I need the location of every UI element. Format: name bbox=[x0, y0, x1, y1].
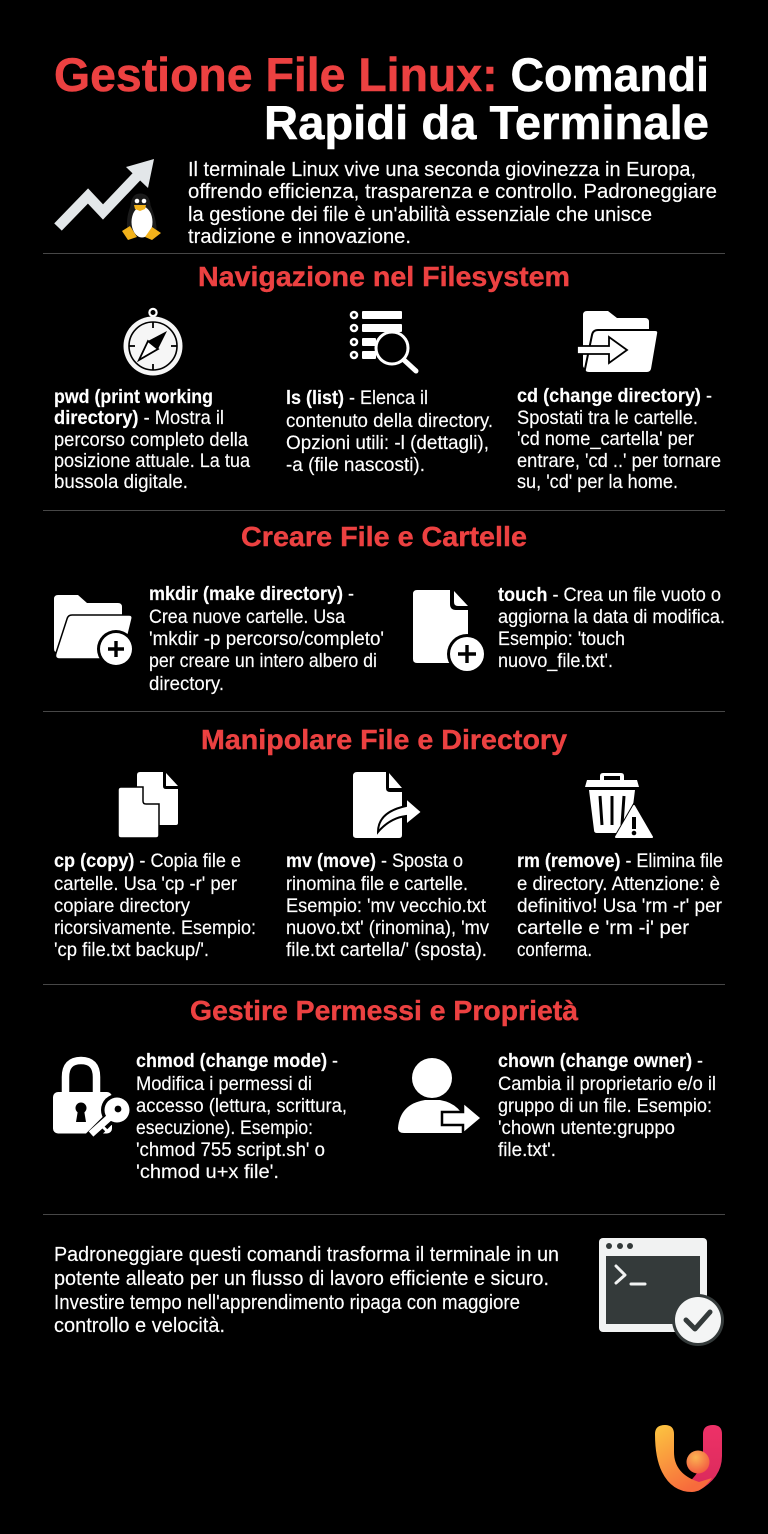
text: mkdir: per creare un intero albero di bbox=[149, 650, 377, 672]
intro text: Il terminale Linux vive una seconda giovinezza in Europa, bbox=[188, 158, 696, 181]
text: touch: Esempio: 'touch bbox=[498, 628, 625, 650]
logo bbox=[655, 1425, 722, 1492]
icon: compass bbox=[124, 309, 182, 376]
intro text: la gestione dei file è un'abilità essenziale che unisce bbox=[188, 203, 652, 226]
text: chown: gruppo di un file. Esempio: bbox=[498, 1095, 712, 1117]
icon: trash warning bbox=[585, 773, 656, 840]
closing text bbox=[54, 1243, 559, 1337]
text: cp: copiare directory bbox=[54, 895, 190, 917]
title: Gestione File Linux: Comandi bbox=[54, 48, 709, 101]
title bbox=[54, 48, 709, 149]
text: pwd: posizione attuale. La tua bbox=[54, 450, 250, 472]
icon: copy bbox=[118, 772, 178, 838]
icon: new folder bbox=[54, 595, 135, 668]
text: touch: touch - Crea un file vuoto o bbox=[498, 584, 721, 606]
text: chown: 'chown utente:gruppo bbox=[498, 1117, 675, 1139]
text: touch: aggiorna la data di modifica. bbox=[498, 606, 725, 628]
icon: folder with arrow bbox=[577, 311, 658, 373]
text: chown bbox=[498, 1050, 716, 1161]
text: chown: Cambia il proprietario e/o il bbox=[498, 1073, 716, 1095]
heading: navigazione: Navigazione nel Filesystem bbox=[198, 261, 570, 292]
text: cd: su, 'cd' per la home. bbox=[517, 471, 678, 493]
text: ls bbox=[286, 387, 493, 476]
text: cp: ricorsivamente. Esempio: bbox=[54, 917, 256, 939]
text: rm: cartelle e 'rm -i' per bbox=[517, 917, 690, 939]
text: mv: nuovo.txt' (rinomina), 'mv bbox=[286, 917, 489, 939]
text: cd: 'cd nome_cartella' per bbox=[517, 428, 694, 450]
icon: terminal with check bbox=[599, 1238, 724, 1346]
text: chmod: 'chmod 755 script.sh' o bbox=[136, 1139, 325, 1161]
text: cd: entrare, 'cd ..' per tornare bbox=[517, 450, 721, 472]
icon: list search bbox=[351, 311, 416, 371]
text: chmod: 'chmod u+x file'. bbox=[136, 1161, 279, 1183]
icon: growth arrow with penguin bbox=[58, 159, 161, 240]
text: mv: mv (move) - Sposta o bbox=[286, 850, 463, 872]
text: cd: Spostati tra le cartelle. bbox=[517, 407, 698, 429]
icon: move file bbox=[353, 772, 422, 838]
text: rm bbox=[517, 850, 723, 961]
text: mkdir: Crea nuove cartelle. Usa bbox=[149, 606, 345, 628]
text: cp: 'cp file.txt backup/'. bbox=[54, 939, 209, 961]
text: pwd: bussola digitale. bbox=[54, 471, 188, 493]
intro text: tradizione e innovazione. bbox=[188, 225, 411, 248]
text: chmod bbox=[136, 1050, 347, 1183]
text: mv: Esempio: 'mv vecchio.txt bbox=[286, 895, 487, 917]
text: chmod: Modifica i permessi di bbox=[136, 1073, 312, 1095]
heading: creare: Creare File e Cartelle bbox=[241, 521, 527, 552]
text: cp bbox=[54, 850, 256, 961]
text: mv: rinomina file e cartelle. bbox=[286, 873, 468, 895]
text: chmod: chmod (change mode) - bbox=[136, 1050, 338, 1072]
text: cd: cd (change directory) - bbox=[517, 385, 712, 407]
text: mkdir: directory. bbox=[149, 673, 224, 695]
text: rm: e directory. Attenzione: è bbox=[517, 873, 720, 895]
text: chmod: esecuzione). Esempio: bbox=[136, 1117, 313, 1139]
text: ls: ls (list) - Elenca il bbox=[286, 387, 428, 409]
text: chmod: accesso (lettura, scrittura, bbox=[136, 1095, 347, 1117]
text: ls: Opzioni utili: -l (dettagli), bbox=[286, 432, 489, 454]
text: ls: contenuto della directory. bbox=[286, 410, 493, 432]
icon: new file bbox=[413, 590, 487, 674]
text: mkdir bbox=[149, 583, 384, 695]
closing text: potente alleato per un flusso di lavoro efficiente e sicuro. bbox=[54, 1267, 549, 1290]
text: pwd: percorso completo della bbox=[54, 429, 248, 451]
heading: manipolare: Manipolare File e Directory bbox=[201, 724, 567, 755]
intro text: offrendo efficienza, trasparenza e controllo. Padroneggiare bbox=[188, 180, 717, 203]
text: rm: definitivo! Usa 'rm -r' per bbox=[517, 895, 722, 917]
text: pwd: pwd (print working bbox=[54, 386, 213, 408]
text: mv: file.txt cartella/' (sposta). bbox=[286, 939, 487, 961]
text: cp: cartelle. Usa 'cp -r' per bbox=[54, 873, 237, 895]
text: touch bbox=[498, 584, 725, 672]
title: Rapidi da Terminale bbox=[264, 96, 709, 149]
text: cd bbox=[517, 385, 721, 493]
closing text: Padroneggiare questi comandi trasforma il terminale in un bbox=[54, 1243, 559, 1266]
text: pwd: directory) - Mostra il bbox=[54, 407, 224, 429]
text: mkdir: mkdir (make directory) - bbox=[149, 583, 354, 605]
icon: lock and key bbox=[53, 1060, 133, 1138]
text: chown: chown (change owner) - bbox=[498, 1050, 703, 1072]
closing text: Investire tempo nell'apprendimento ripaga con maggiore bbox=[54, 1291, 520, 1314]
text: pwd bbox=[54, 386, 250, 493]
heading: permessi: Gestire Permessi e Proprietà bbox=[190, 995, 578, 1026]
text: mkdir: 'mkdir -p percorso/completo' bbox=[149, 628, 384, 650]
text: rm: rm (remove) - Elimina file bbox=[517, 850, 723, 872]
text: rm: conferma. bbox=[517, 939, 592, 961]
icon: user transfer bbox=[398, 1058, 482, 1134]
intro text bbox=[188, 158, 717, 248]
text: touch: nuovo_file.txt'. bbox=[498, 650, 613, 672]
text: ls: -a (file nascosti). bbox=[286, 454, 425, 476]
closing text: controllo e velocità. bbox=[54, 1314, 225, 1337]
text: cp: cp (copy) - Copia file e bbox=[54, 850, 241, 872]
text: chown: file.txt'. bbox=[498, 1139, 556, 1161]
text: mv bbox=[286, 850, 489, 961]
